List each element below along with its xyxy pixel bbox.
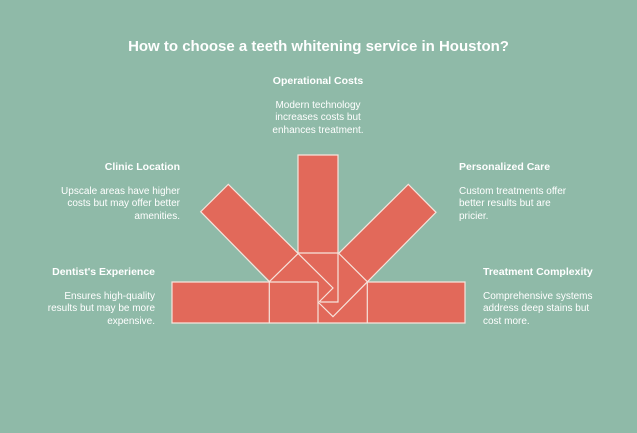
text: treatment complexity [483,266,593,326]
text: clinic location: Upscale areas have higher costs but may offer better amenities. [61,186,180,222]
text: personalized care [459,161,566,222]
text: dentist's experience: Dentist's Experience [52,266,155,278]
text: dentist's experience [48,266,155,326]
title: How to choose a teeth whitening service in Houston? [128,38,509,55]
text: operational costs [272,75,364,136]
text: personalized care: Custom treatments offer better results but are pricier. [459,186,566,222]
text: treatment complexity: Comprehensive systems address deep stains but cost more. [483,290,592,326]
bar: vertical [298,155,338,302]
bar: left diagonal [201,184,333,316]
text: operational costs: Modern technology increases costs but enhances treatment. [272,100,364,136]
bar: horizontal base [172,282,465,323]
text: dentist's experience: Ensures high-quality results but may be more expensive. [48,290,155,326]
hub: diamond [269,253,367,282]
text: clinic location [61,161,180,222]
text: personalized care: Personalized Care [459,161,550,173]
text: operational costs: Operational Costs [273,75,363,87]
bar: right diagonal [305,184,436,317]
text: treatment complexity: Treatment Complexity [483,266,593,278]
text: clinic location: Clinic Location [105,161,180,173]
